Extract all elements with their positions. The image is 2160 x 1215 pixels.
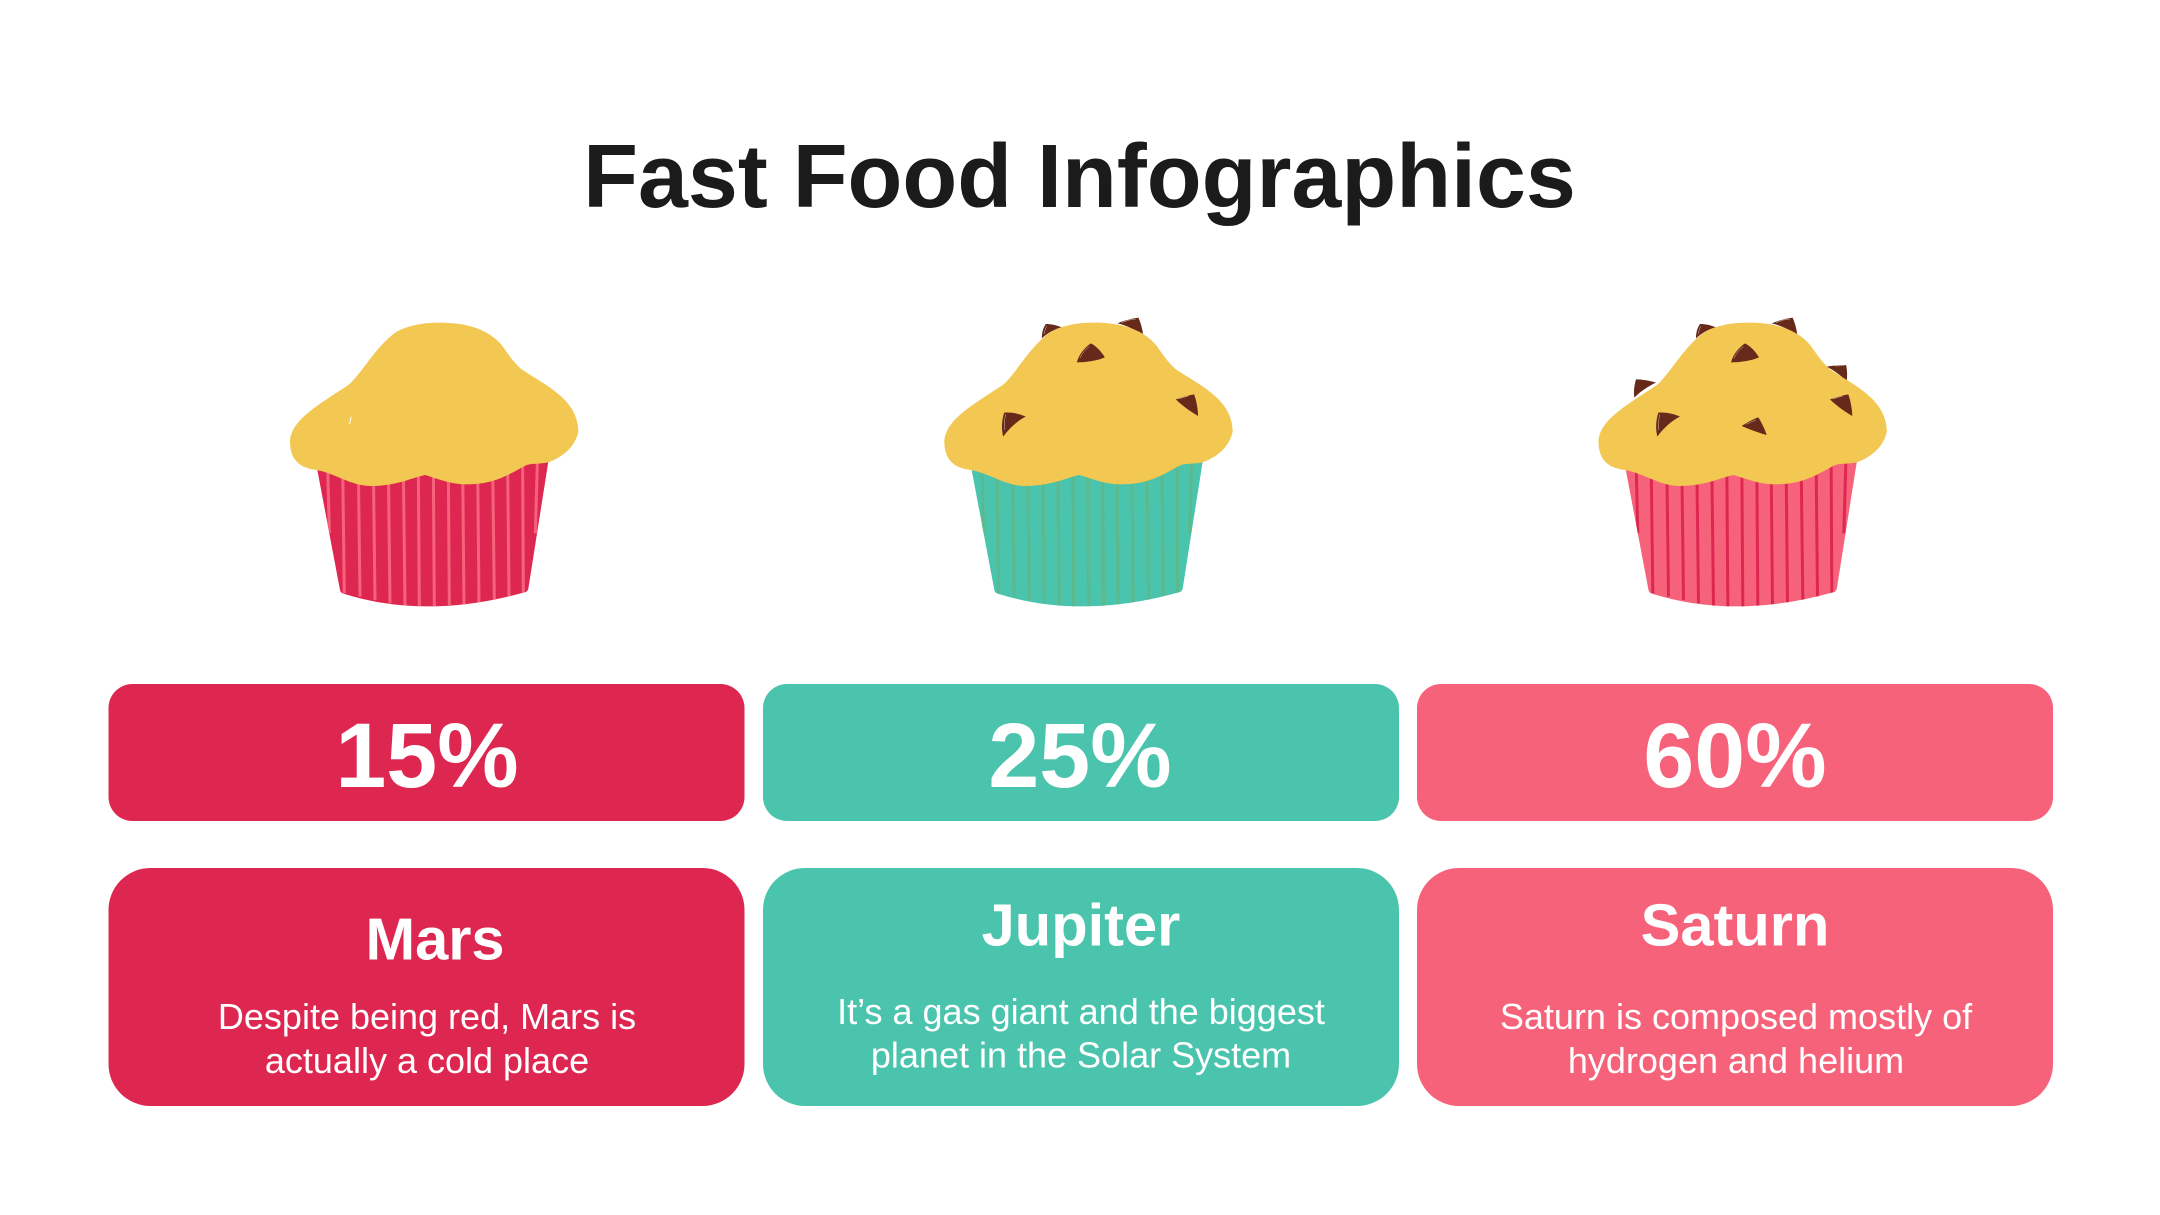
panel: Mars percentage <box>108 684 744 821</box>
panel: Mars description <box>108 868 744 1106</box>
panel: Jupiter percentage: 25% <box>988 705 1172 807</box>
panel: Mars percentage: 15% <box>335 705 519 807</box>
panel: Saturn percentage <box>1417 684 2053 821</box>
panel: Saturn description: Saturn <box>1641 892 1829 958</box>
panel: Mars description: Mars <box>365 906 505 972</box>
panel: Saturn description: hydrogen and helium <box>1568 1040 1904 1081</box>
panel: Jupiter description <box>763 868 1399 1106</box>
panel: Saturn description: Saturn is composed mostly of <box>1500 996 1973 1037</box>
panel: Saturn description <box>1417 868 2053 1106</box>
panel: Jupiter description: planet in the Solar System <box>871 1034 1291 1076</box>
panel: Jupiter description: Jupiter <box>982 892 1180 958</box>
panel: Jupiter percentage <box>763 684 1399 821</box>
icon: plain red muffin <box>290 323 578 607</box>
icon: teal chocolate chip muffin <box>944 318 1233 607</box>
panel: Mars description: actually a cold place <box>265 1040 589 1081</box>
panel: Jupiter description: It’s a gas giant and the biggest <box>837 991 1325 1032</box>
panel: Saturn percentage: 60% <box>1643 705 1827 807</box>
title: Fast Food Infographics <box>583 127 1576 227</box>
icon: pink chocolate chip muffin <box>1598 318 1887 607</box>
panel: Mars description: Despite being red, Mars is <box>218 996 636 1037</box>
